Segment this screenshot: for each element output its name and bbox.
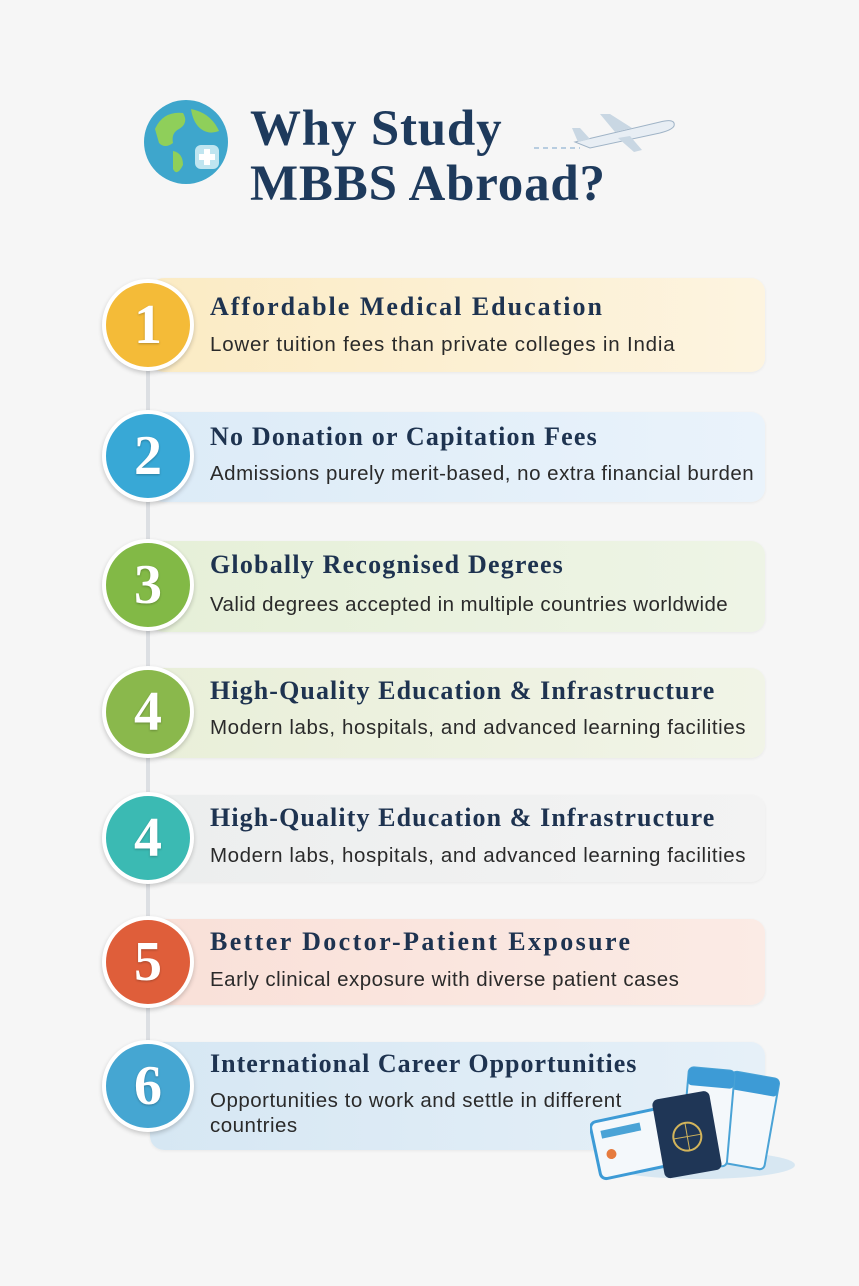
badge 5 [102,916,194,1008]
title: Why Study [250,101,502,157]
card 3: Globally Recognised Degrees [210,550,564,579]
card 6: Early clinical exposure with diverse patient cases [210,968,679,991]
badge 6: 6 [134,1055,162,1117]
badge 1 [102,279,194,371]
card 4: High-Quality Education & Infrastructure [210,676,715,705]
badge 2 [102,410,194,502]
title: MBBS Abroad? [250,156,606,212]
icon: passport and tickets [590,1066,795,1180]
card 2: Admissions purely merit-based, no extra financial burden [210,462,754,485]
badge 6 [102,1040,194,1132]
badge 4 teal [102,792,194,884]
card 3: Valid degrees accepted in multiple countries worldwide [210,593,728,616]
card 2 [150,412,765,502]
badge 3 [102,539,194,631]
card 1 [150,278,765,372]
card 3 [150,541,765,632]
card 1: Lower tuition fees than private colleges in India [210,333,675,356]
card 7: International Career Opportunities [210,1049,637,1078]
card 7 [150,1042,765,1150]
badge 2: 2 [134,425,162,487]
card 4 [150,668,765,758]
title [250,101,606,212]
card 6 [150,919,765,1005]
card 1: Affordable Medical Education [210,292,604,321]
badge 5: 5 [134,931,162,993]
badge 3: 3 [134,554,162,616]
badge 4 teal: 4 [134,807,162,869]
card 6: Better Doctor-Patient Exposure [210,927,632,956]
card 7: countries [210,1114,298,1137]
badge 1: 1 [134,294,162,356]
card 2: No Donation or Capitation Fees [210,422,598,451]
badge 4 [102,666,194,758]
card 5: Modern labs, hospitals, and advanced learning facilities [210,844,746,867]
badge 4: 4 [134,681,162,743]
icon: airplane [534,114,675,152]
icon: globe [144,100,228,184]
card 7: Opportunities to work and settle in different [210,1089,622,1112]
card 4: Modern labs, hospitals, and advanced learning facilities [210,716,746,739]
card 5 [150,795,765,882]
card 5: High-Quality Education & Infrastructure [210,803,715,832]
